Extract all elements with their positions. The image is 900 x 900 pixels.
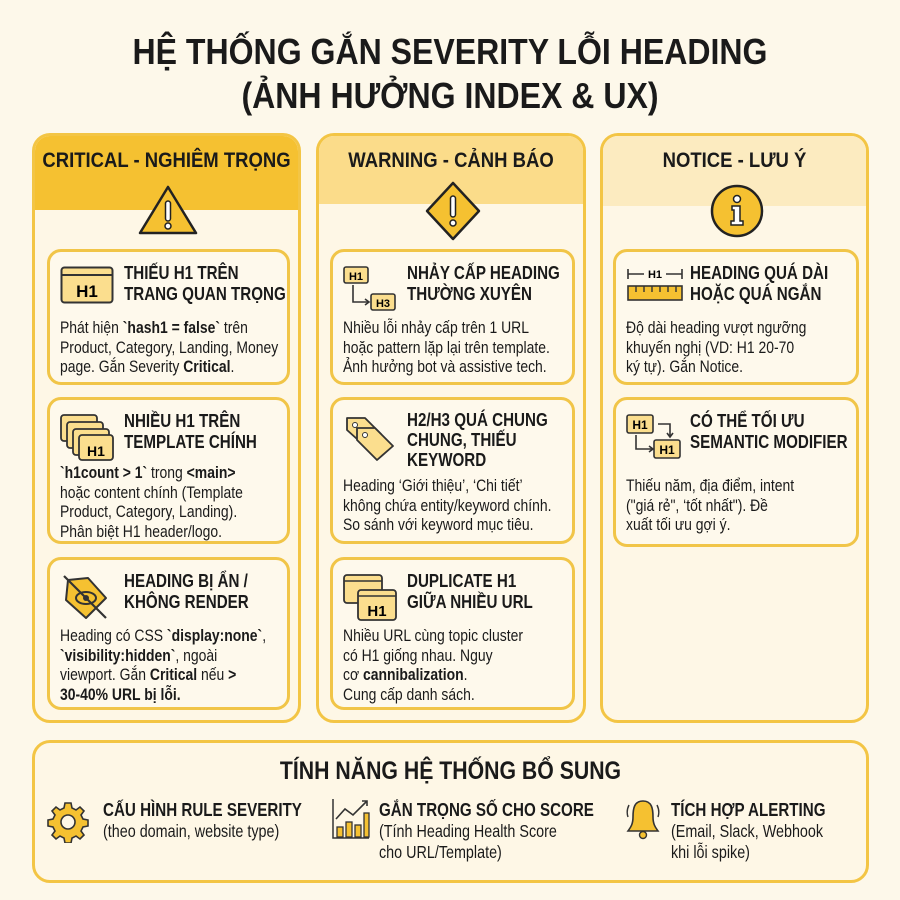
icon: H1 to H3: H3 xyxy=(376,298,390,310)
card title: KEYWORD xyxy=(407,449,486,470)
card title: HEADING BỊ ẨN / xyxy=(124,570,248,591)
card text: không chứa entity/keyword chính. xyxy=(343,496,551,514)
card text xyxy=(60,463,243,540)
card title xyxy=(124,262,286,304)
panel: additional features xyxy=(32,740,869,883)
icon: bell xyxy=(626,800,660,840)
feature text: (theo domain, website type) xyxy=(103,821,279,841)
card title: HOẶC QUÁ NGẮN xyxy=(690,283,821,304)
card text: Product, Category, Landing, Money xyxy=(60,338,278,356)
card text: ("giá rẻ", ‘tốt nhất"). Đề xyxy=(626,496,768,514)
icon: warning diamond xyxy=(426,182,480,240)
icon: hidden eye tag xyxy=(63,575,107,619)
card text: Product, Category, Landing). xyxy=(60,502,237,521)
feature text: cho URL/Template) xyxy=(379,842,502,862)
card text xyxy=(626,476,794,534)
card text: hoặc content chính (Template xyxy=(60,482,243,502)
card text xyxy=(626,318,806,376)
card title: DUPLICATE H1 xyxy=(407,570,516,591)
title xyxy=(133,31,767,116)
card text: ký tự). Gắn Notice. xyxy=(626,357,743,376)
card: hidden heading xyxy=(47,557,290,710)
card title xyxy=(407,409,548,470)
icon: duplicate windows: H1 xyxy=(367,603,387,620)
icon: H1 to H3: H1 xyxy=(349,271,363,283)
heading: critical: CRITICAL - NGHIÊM TRỌNG xyxy=(42,148,291,172)
card text: `visibility:hidden`, ngoài xyxy=(60,646,217,664)
card title xyxy=(690,410,848,452)
heading: notice: NOTICE - LƯU Ý xyxy=(663,148,806,172)
card text: Heading có CSS `display:none`, xyxy=(60,626,266,645)
icon: tags xyxy=(346,417,394,461)
icon: stacked H1 windows xyxy=(60,414,114,461)
feature text: (Email, Slack, Webhook xyxy=(671,821,823,841)
feature text: (Tính Heading Health Score xyxy=(379,821,557,841)
card: generic H2/H3 xyxy=(330,397,575,544)
title: (ẢNH HƯỞNG INDEX & UX) xyxy=(241,75,659,116)
card: semantic modifier xyxy=(613,397,859,547)
card title xyxy=(124,570,249,612)
card title: THƯỜNG XUYÊN xyxy=(407,283,532,304)
card text: Thiếu năm, địa điểm, intent xyxy=(626,476,794,495)
card text: Nhiều URL cùng topic cluster xyxy=(343,626,523,645)
card title: SEMANTIC MODIFIER xyxy=(690,431,848,452)
heading: warning: WARNING - CẢNH BÁO xyxy=(348,148,554,172)
card text: Cung cấp danh sách. xyxy=(343,684,475,704)
card text xyxy=(343,476,551,534)
card text xyxy=(60,626,266,704)
card text: Heading ‘Giới thiệu’, ‘Chi tiết’ xyxy=(343,476,523,495)
card title: CHUNG, THIẾU xyxy=(407,429,517,450)
card text: Phát hiện `hash1 = false` trên xyxy=(60,318,248,337)
card title xyxy=(124,410,257,452)
card title: TEMPLATE CHÍNH xyxy=(124,431,257,452)
icon: stacked H1 windows: H1 xyxy=(87,443,105,459)
card: heading level skip xyxy=(330,249,575,385)
icon: H1 window xyxy=(60,266,114,304)
feature title: GẮN TRỌNG SỐ CHO SCORE xyxy=(379,799,594,820)
card text: page. Gắn Severity Critical. xyxy=(60,357,234,376)
card title: H2/H3 QUÁ CHUNG xyxy=(407,409,548,430)
card title: KHÔNG RENDER xyxy=(124,591,249,612)
card: heading length xyxy=(613,249,859,385)
card title: HEADING QUÁ DÀI xyxy=(690,262,828,283)
panel: critical xyxy=(32,133,301,723)
card title xyxy=(407,262,560,304)
feature title: TÍCH HỢP ALERTING xyxy=(671,799,826,820)
card text: 30-40% URL bị lỗi. xyxy=(60,684,181,704)
header band critical xyxy=(35,136,298,210)
icon: ruler: H1 xyxy=(648,269,662,281)
card title: TRANG QUAN TRỌNG xyxy=(124,283,286,304)
panel: notice xyxy=(600,133,869,723)
icon: warning triangle xyxy=(138,186,198,234)
card text xyxy=(343,318,550,376)
card title xyxy=(407,570,533,612)
icon: H1 window: H1 xyxy=(76,282,98,301)
header band warning xyxy=(319,136,583,204)
card: duplicate H1 xyxy=(330,557,575,710)
title: HỆ THỐNG GẮN SEVERITY LỖI HEADING xyxy=(133,31,767,72)
card text: Phân biệt H1 header/logo. xyxy=(60,522,222,540)
feature: score weight xyxy=(332,799,594,862)
card text: cơ cannibalization. xyxy=(343,665,468,684)
feature: alerting xyxy=(626,799,826,862)
card title: THIẾU H1 TRÊN xyxy=(124,262,239,283)
card text: Ảnh hưởng bot và assistive tech. xyxy=(343,357,547,376)
feature text xyxy=(379,821,557,862)
card text xyxy=(60,318,278,376)
card: missing H1 xyxy=(47,249,290,385)
card text: Độ dài heading vượt ngưỡng xyxy=(626,318,806,337)
card text: khuyến nghị (VD: H1 20-70 xyxy=(626,338,794,356)
header band notice xyxy=(603,136,866,206)
card title: GIỮA NHIỀU URL xyxy=(407,591,533,612)
card text xyxy=(343,626,523,704)
icon: ruler xyxy=(627,269,683,301)
feature title: CẤU HÌNH RULE SEVERITY xyxy=(103,799,302,820)
icon: H1 swap: H1 xyxy=(659,443,675,457)
icon: info circle xyxy=(710,184,764,238)
card text: viewport. Gắn Critical nếu > xyxy=(60,665,236,684)
feature: rule config xyxy=(47,799,302,843)
card text: có H1 giống nhau. Nguy xyxy=(343,646,493,664)
card text: So sánh với keyword mục tiêu. xyxy=(343,515,533,534)
feature text: khi lỗi spike) xyxy=(671,842,750,862)
icon: duplicate windows xyxy=(343,574,397,621)
card title: NHẢY CẤP HEADING xyxy=(407,262,560,283)
card text: xuất tối ưu gợi ý. xyxy=(626,515,730,534)
icon: H1 swap xyxy=(626,414,681,459)
card title xyxy=(690,262,828,304)
icon: H1 swap: H1 xyxy=(632,418,648,432)
icon: H1 to H3 xyxy=(343,266,396,311)
panel: warning xyxy=(316,133,586,723)
card text: Nhiều lỗi nhảy cấp trên 1 URL xyxy=(343,318,529,337)
heading: features: TÍNH NĂNG HỆ THỐNG BỔ SUNG xyxy=(280,757,621,785)
icon: gear xyxy=(47,802,89,843)
feature text xyxy=(671,821,823,862)
card title: NHIỀU H1 TRÊN xyxy=(124,410,240,431)
card: multiple H1 xyxy=(47,397,290,544)
card text: `h1count > 1` trong <main> xyxy=(60,463,235,482)
card title: CÓ THỂ TỐI ƯU xyxy=(690,410,805,431)
icon: bar chart xyxy=(332,799,370,839)
card text: hoặc pattern lặp lại trên template. xyxy=(343,338,550,356)
